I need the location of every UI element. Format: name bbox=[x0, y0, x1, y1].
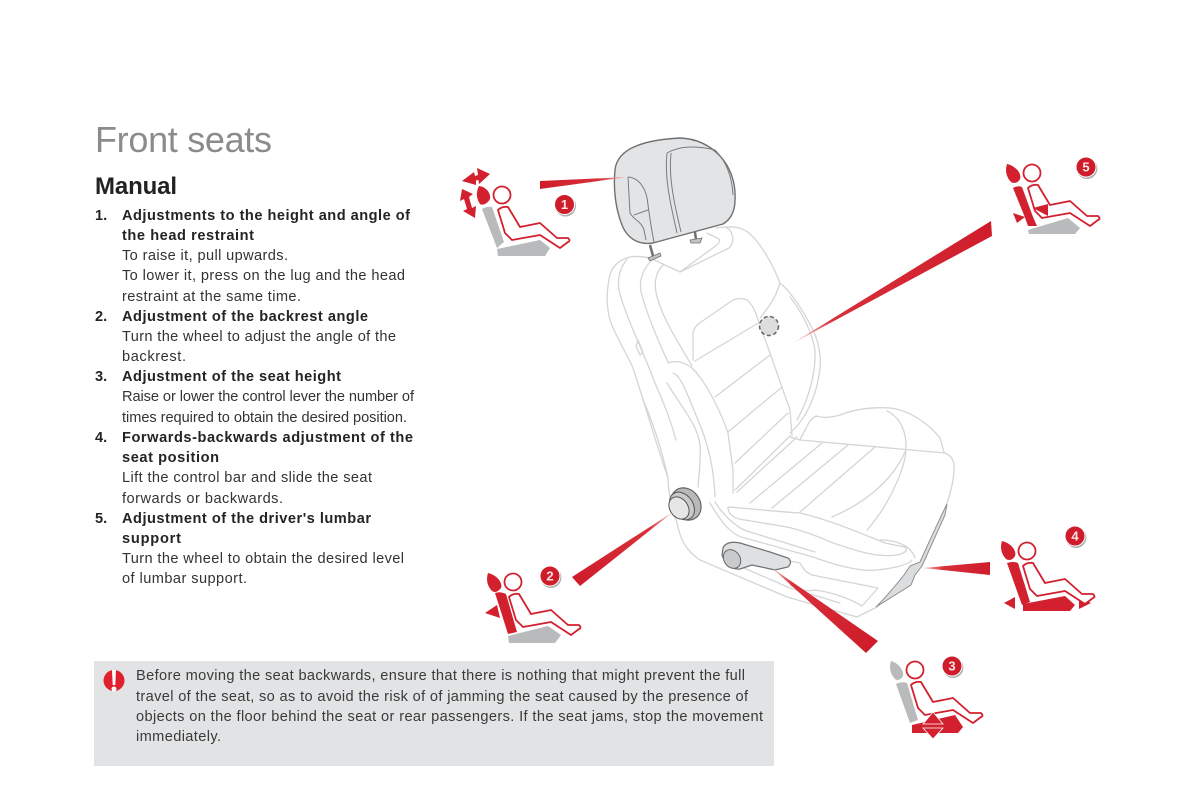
item 3: seat height bbox=[95, 369, 415, 426]
item 1: head restraint: To raise it, pull upwards. bbox=[122, 248, 288, 264]
warning text bbox=[136, 668, 763, 745]
icon 3: seat height adjustment bbox=[890, 661, 982, 739]
icon 5: lumbar support adjustment bbox=[1006, 164, 1100, 234]
badge 2: 2 bbox=[546, 568, 554, 584]
item 3: seat height: Raise or lower the control lever the number of bbox=[122, 389, 415, 405]
item 2: backrest angle bbox=[95, 309, 396, 365]
badge 4 bbox=[1065, 526, 1086, 548]
item 2: backrest angle: Adjustment of the backrest angle bbox=[122, 309, 368, 325]
badge 3 bbox=[942, 656, 964, 678]
item 4: forwards-backwards: Lift the control bar and slide the seat bbox=[122, 470, 372, 486]
seat backrest outline bbox=[607, 227, 820, 497]
pointer 3 bbox=[772, 568, 878, 653]
icon 4: forwards-backwards adjustment bbox=[1001, 541, 1094, 611]
seat illustration bbox=[607, 138, 954, 617]
item 2: backrest angle: backrest. bbox=[122, 349, 186, 365]
icon 2: backrest angle adjustment bbox=[485, 573, 580, 643]
badge 1 bbox=[554, 194, 576, 216]
item 4: forwards-backwards: seat position bbox=[122, 450, 219, 466]
item 4: forwards-backwards: 4. bbox=[95, 430, 107, 446]
item 2: backrest angle: Turn the wheel to adjust the angle of the bbox=[122, 329, 396, 345]
warning text: travel of the seat, so as to avoid the risk of of jamming the seat caused by the presence of bbox=[136, 689, 749, 705]
pointer 1 bbox=[540, 177, 628, 189]
item 1: head restraint: 1. bbox=[95, 208, 107, 224]
item 4: forwards-backwards: Forwards-backwards adjustment of the bbox=[122, 430, 413, 446]
warning text: objects on the floor behind the seat or rear passengers. If the seat jams, stop the movement bbox=[136, 709, 763, 725]
icon: warning exclamation bbox=[104, 670, 124, 692]
item 5: lumbar support: Adjustment of the driver's lumbar bbox=[122, 511, 371, 527]
item 1: head restraint: restraint at the same time. bbox=[122, 289, 301, 305]
item 1: head restraint: the head restraint bbox=[122, 228, 254, 244]
item 5: lumbar support: of lumbar support. bbox=[122, 571, 247, 587]
warning text: immediately. bbox=[136, 729, 221, 745]
pointer 5 bbox=[793, 221, 992, 343]
badge 3: 3 bbox=[948, 658, 956, 674]
item 5: lumbar support: 5. bbox=[95, 511, 107, 527]
backrest wheel bbox=[664, 482, 707, 526]
item 5: lumbar support bbox=[95, 511, 404, 587]
icon 1: head restraint adjustment bbox=[460, 168, 570, 256]
item 3: seat height: times required to obtain the desired position. bbox=[122, 410, 407, 426]
seat height lever bbox=[720, 542, 790, 572]
item 1: head restraint: To lower it, press on the lug and the head bbox=[122, 268, 405, 284]
item 5: lumbar support: support bbox=[122, 531, 181, 547]
badge 5: 5 bbox=[1082, 160, 1090, 174]
item 1: head restraint bbox=[95, 208, 410, 305]
heading: Manual: Manual bbox=[95, 173, 177, 200]
item 3: seat height: Adjustment of the seat height bbox=[122, 369, 341, 385]
badge 5 bbox=[1076, 157, 1098, 179]
text block: adjustment list bbox=[95, 208, 415, 587]
lumbar wheel with dashed circle bbox=[760, 316, 778, 336]
head restraint bbox=[614, 138, 735, 261]
item 4: forwards-backwards: forwards or backwards. bbox=[122, 491, 283, 507]
warning text: Before moving the seat backwards, ensure that there is nothing that might prevent the full bbox=[136, 668, 745, 684]
item 5: lumbar support: Turn the wheel to obtain the desired level bbox=[122, 551, 404, 567]
pointer 2 bbox=[572, 512, 673, 586]
title: Front seats bbox=[95, 119, 272, 160]
badge 2 bbox=[540, 566, 562, 588]
badge 4: 4 bbox=[1071, 528, 1079, 544]
seat side trim bar bbox=[876, 504, 947, 607]
seat cushion outline bbox=[668, 408, 954, 617]
panel: warning callout bbox=[94, 661, 774, 766]
badge 1: 1 bbox=[561, 197, 568, 212]
item 4: forwards-backwards bbox=[95, 430, 413, 507]
item 1: head restraint: Adjustments to the height and angle of bbox=[122, 208, 410, 224]
pointer 4 bbox=[923, 562, 990, 575]
item 2: backrest angle: 2. bbox=[95, 309, 107, 325]
item 3: seat height: 3. bbox=[95, 369, 107, 385]
